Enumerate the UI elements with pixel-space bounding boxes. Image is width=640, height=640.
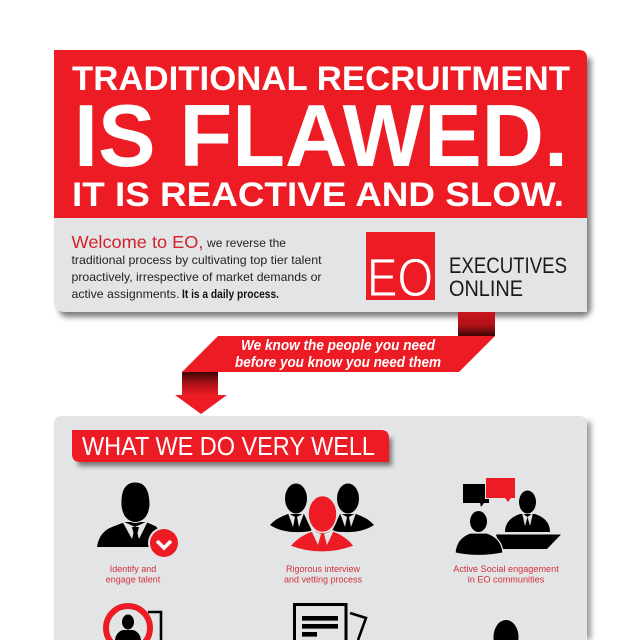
icon: conversation at desk [455,478,561,556]
icon: person with check [97,482,180,559]
text: welcome intro: active assignments. [72,288,180,301]
heading shadow [78,438,392,466]
caption: identify and engage talent [106,564,161,584]
text: welcome intro: we reverse the [206,237,286,250]
caption: rigorous interview [284,564,363,584]
panel shadow: what we do [59,422,591,640]
heading: traditional recruitment: TRADITIONAL RECRUITMENT [72,60,570,98]
logo: wordmark: ONLINE [449,276,523,301]
caption: active social engagement: in EO communities [468,574,545,584]
caption: active social engagement: Active Social engagement [453,564,559,574]
text: welcome intro: Welcome to EO, [72,232,204,252]
logo: wordmark [449,253,567,301]
text: ribbon slogan: We know the people you need [241,337,436,354]
icon: group of three people [270,484,374,552]
caption: rigorous interview: Rigorous interview [286,564,361,574]
heading: reactive and slow: IT IS REACTIVE AND SLOW. [72,176,564,214]
text: welcome intro: It is a daily process. [182,288,279,301]
panel: what we do very well [54,416,587,640]
text: welcome intro [72,232,322,301]
panel: welcome grey [54,218,587,312]
caption: identify and engage talent: Identify and [110,564,156,574]
panel: hero red banner [54,50,587,218]
caption: identify and engage talent: engage talent [106,574,161,584]
logo: wordmark: EXECUTIVES [449,253,567,278]
heading: is flawed: IS FLAWED. [74,86,568,185]
text: welcome intro: traditional process by cultivating top tier talent [72,254,322,267]
caption: rigorous interview: and vetting process [284,574,363,584]
icon: candidate profile document [106,606,161,640]
text: ribbon slogan: before you know you need them [235,354,441,371]
icon: documents [294,604,366,640]
arrow: ribbon connector [175,312,495,414]
heading: what we do very well: WHAT WE DO VERY WELL [82,431,375,461]
logo: EO square: EO [367,248,433,308]
logo: EO square [366,232,435,308]
icon: person head bottom right [494,620,518,640]
text: welcome intro: proactively, irrespective of market demands or [72,271,322,284]
text: ribbon slogan [235,337,441,371]
panel: hero shadow [59,58,591,317]
caption: active social engagement [453,564,559,584]
